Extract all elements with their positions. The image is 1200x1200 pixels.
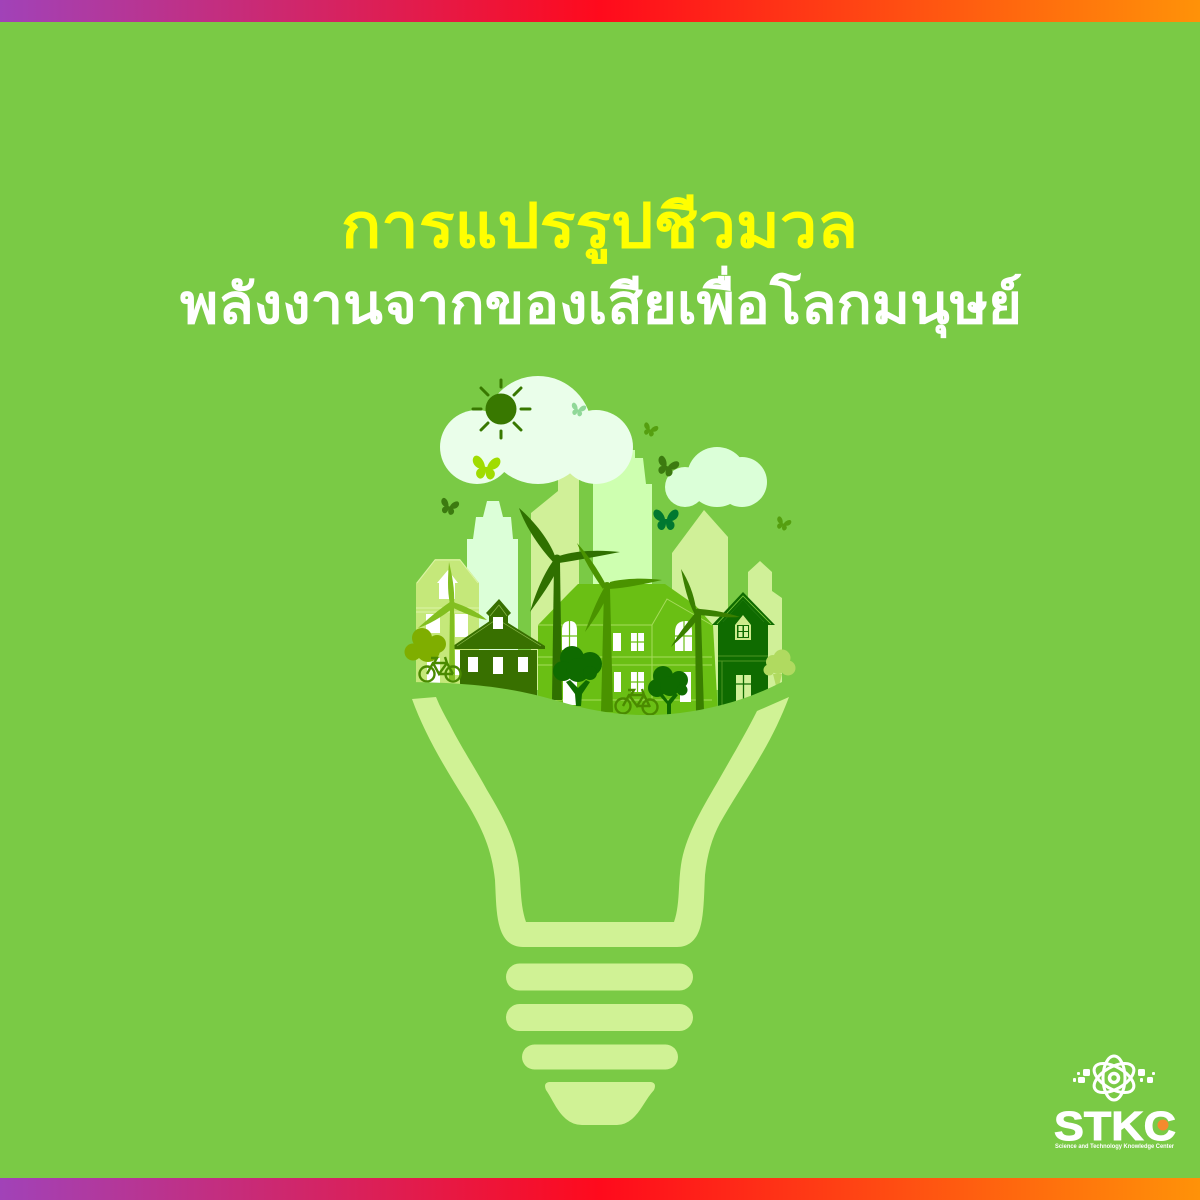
left pale building: [416, 559, 479, 690]
logo: STKC: [1054, 1056, 1176, 1150]
light bulb outline: [412, 697, 789, 947]
bulb base threads: [506, 964, 693, 1125]
skyline buildings: [467, 450, 782, 700]
title line 1: การแปรรูปชีวมวล: [341, 192, 858, 264]
wind turbines: [418, 508, 740, 712]
bicycles: [420, 657, 658, 714]
title line 2: พลังงานจากของเสียเพื่อโลกมนุษย์: [180, 265, 1022, 339]
icon: atom: [1073, 1056, 1155, 1100]
butterflies: [438, 402, 792, 532]
trees: [404, 628, 796, 716]
clouds: [440, 376, 767, 507]
hill: [400, 672, 800, 735]
icon: sun: [473, 380, 530, 438]
logo tagline: Science and Technology Knowledge Center: [1055, 1144, 1175, 1150]
middle green building: [538, 584, 718, 715]
bottom gradient bar: [0, 1178, 1200, 1200]
dark house left: [453, 599, 545, 700]
top gradient bar: [0, 0, 1200, 22]
illustration: green city: [400, 376, 800, 735]
dark house right: [712, 592, 775, 715]
logo wordmark: STKC: [1054, 1103, 1176, 1149]
